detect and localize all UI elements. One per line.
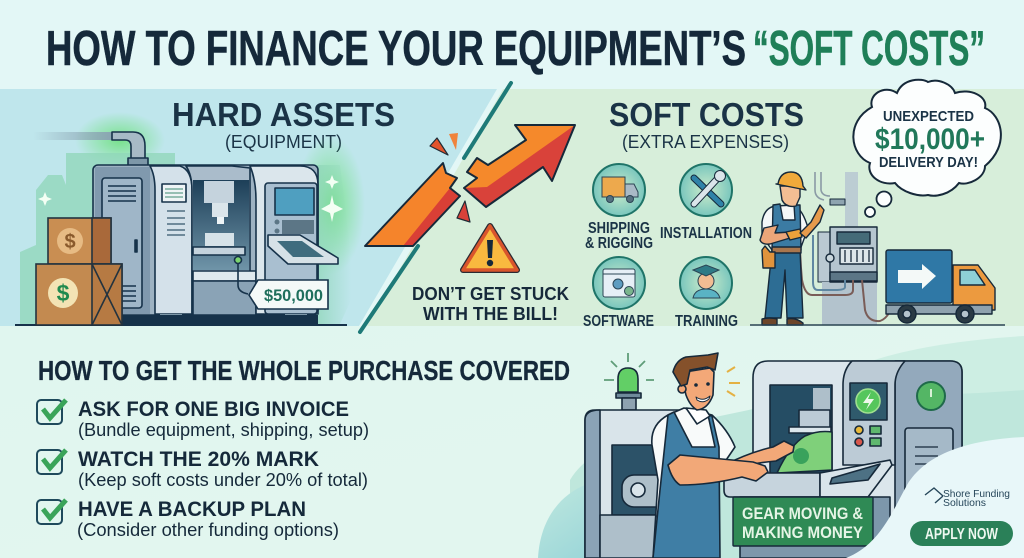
heading: soft costs: (EXTRA EXPENSES): [622, 132, 789, 152]
checklist item 1: [37, 398, 369, 440]
heading: soft costs: [609, 96, 804, 152]
icon: installation: [680, 164, 732, 216]
label: shipping: SHIPPING: [588, 220, 650, 237]
machine label: MAKING MONEY: [742, 523, 864, 542]
diagonal divider: [360, 83, 511, 332]
warning text: DON’T GET STUCK: [412, 284, 569, 304]
price tag: [249, 280, 328, 309]
apply button: APPLY NOW: [925, 526, 998, 543]
label: shipping: & RIGGING: [585, 235, 653, 252]
price tag: $50,000: [264, 286, 323, 305]
checklist item 2: WATCH THE 20% MARK: [78, 448, 319, 471]
thought bubble: UNEXPECTED: [883, 108, 974, 125]
thought bubble: $10,000+: [875, 123, 985, 156]
label: shipping: [585, 220, 653, 252]
warning text: WITH THE BILL!: [423, 304, 558, 324]
illustration: happy operator: [652, 353, 794, 558]
heading: hard assets: (EQUIPMENT): [225, 132, 342, 152]
icon: stacked money crates: $: [57, 280, 70, 306]
heading: how to get covered: HOW TO GET THE WHOLE PURCHASE COVERED: [38, 355, 570, 386]
illustration: left machine with green beacon: [585, 353, 682, 558]
panel: hard assets: [0, 89, 497, 326]
icon: shipping: [593, 164, 645, 216]
warning text: [412, 284, 569, 324]
illustration: worker: [760, 172, 824, 325]
illustration: CNC machine: [15, 112, 365, 325]
checklist item 3: (Consider other funding options): [77, 520, 339, 540]
checklist item 1: (Bundle equipment, shipping, setup): [78, 420, 369, 440]
logo: Shore Funding: [943, 488, 1010, 500]
bottom background: [0, 326, 1024, 558]
label: training: TRAINING: [675, 313, 738, 330]
panel: soft costs: [367, 89, 1024, 326]
logo: [925, 488, 1010, 509]
logo: Solutions: [943, 497, 986, 509]
heading: soft costs: SOFT COSTS: [609, 96, 804, 133]
illustration: electric panel: [800, 172, 891, 325]
checklist item 2: (Keep soft costs under 20% of total): [78, 470, 368, 490]
heading: hard assets: HARD ASSETS: [172, 96, 395, 133]
label: software: SOFTWARE: [583, 313, 654, 330]
checklist item 3: HAVE A BACKUP PLAN: [78, 498, 306, 521]
label: installation: INSTALLATION: [660, 225, 752, 242]
checklist item 2: [37, 448, 368, 490]
ground line: [750, 324, 1005, 326]
machine label: [733, 497, 873, 546]
illustration: right machine: [724, 361, 962, 558]
icon: stacked money crates: $: [64, 231, 76, 253]
icon: broken arrow: [365, 125, 575, 246]
corner wave: [846, 437, 1024, 558]
heading: hard assets: [172, 96, 395, 152]
machine label: GEAR MOVING &: [742, 504, 863, 523]
apply button: [910, 521, 1013, 546]
checklist item 3: [37, 498, 339, 540]
thought bubble: [853, 80, 1001, 217]
thought bubble: DELIVERY DAY!: [879, 154, 978, 171]
icon: stacked money crates: [36, 218, 122, 325]
icon: training: [680, 257, 732, 309]
icon: software: [593, 257, 645, 309]
icon: delivery truck: [886, 250, 995, 323]
title: HOW TO FINANCE YOUR EQUIPMENT’S: [46, 22, 746, 76]
checklist item 1: ASK FOR ONE BIG INVOICE: [78, 398, 349, 421]
icon: warning triangle: [463, 226, 517, 270]
